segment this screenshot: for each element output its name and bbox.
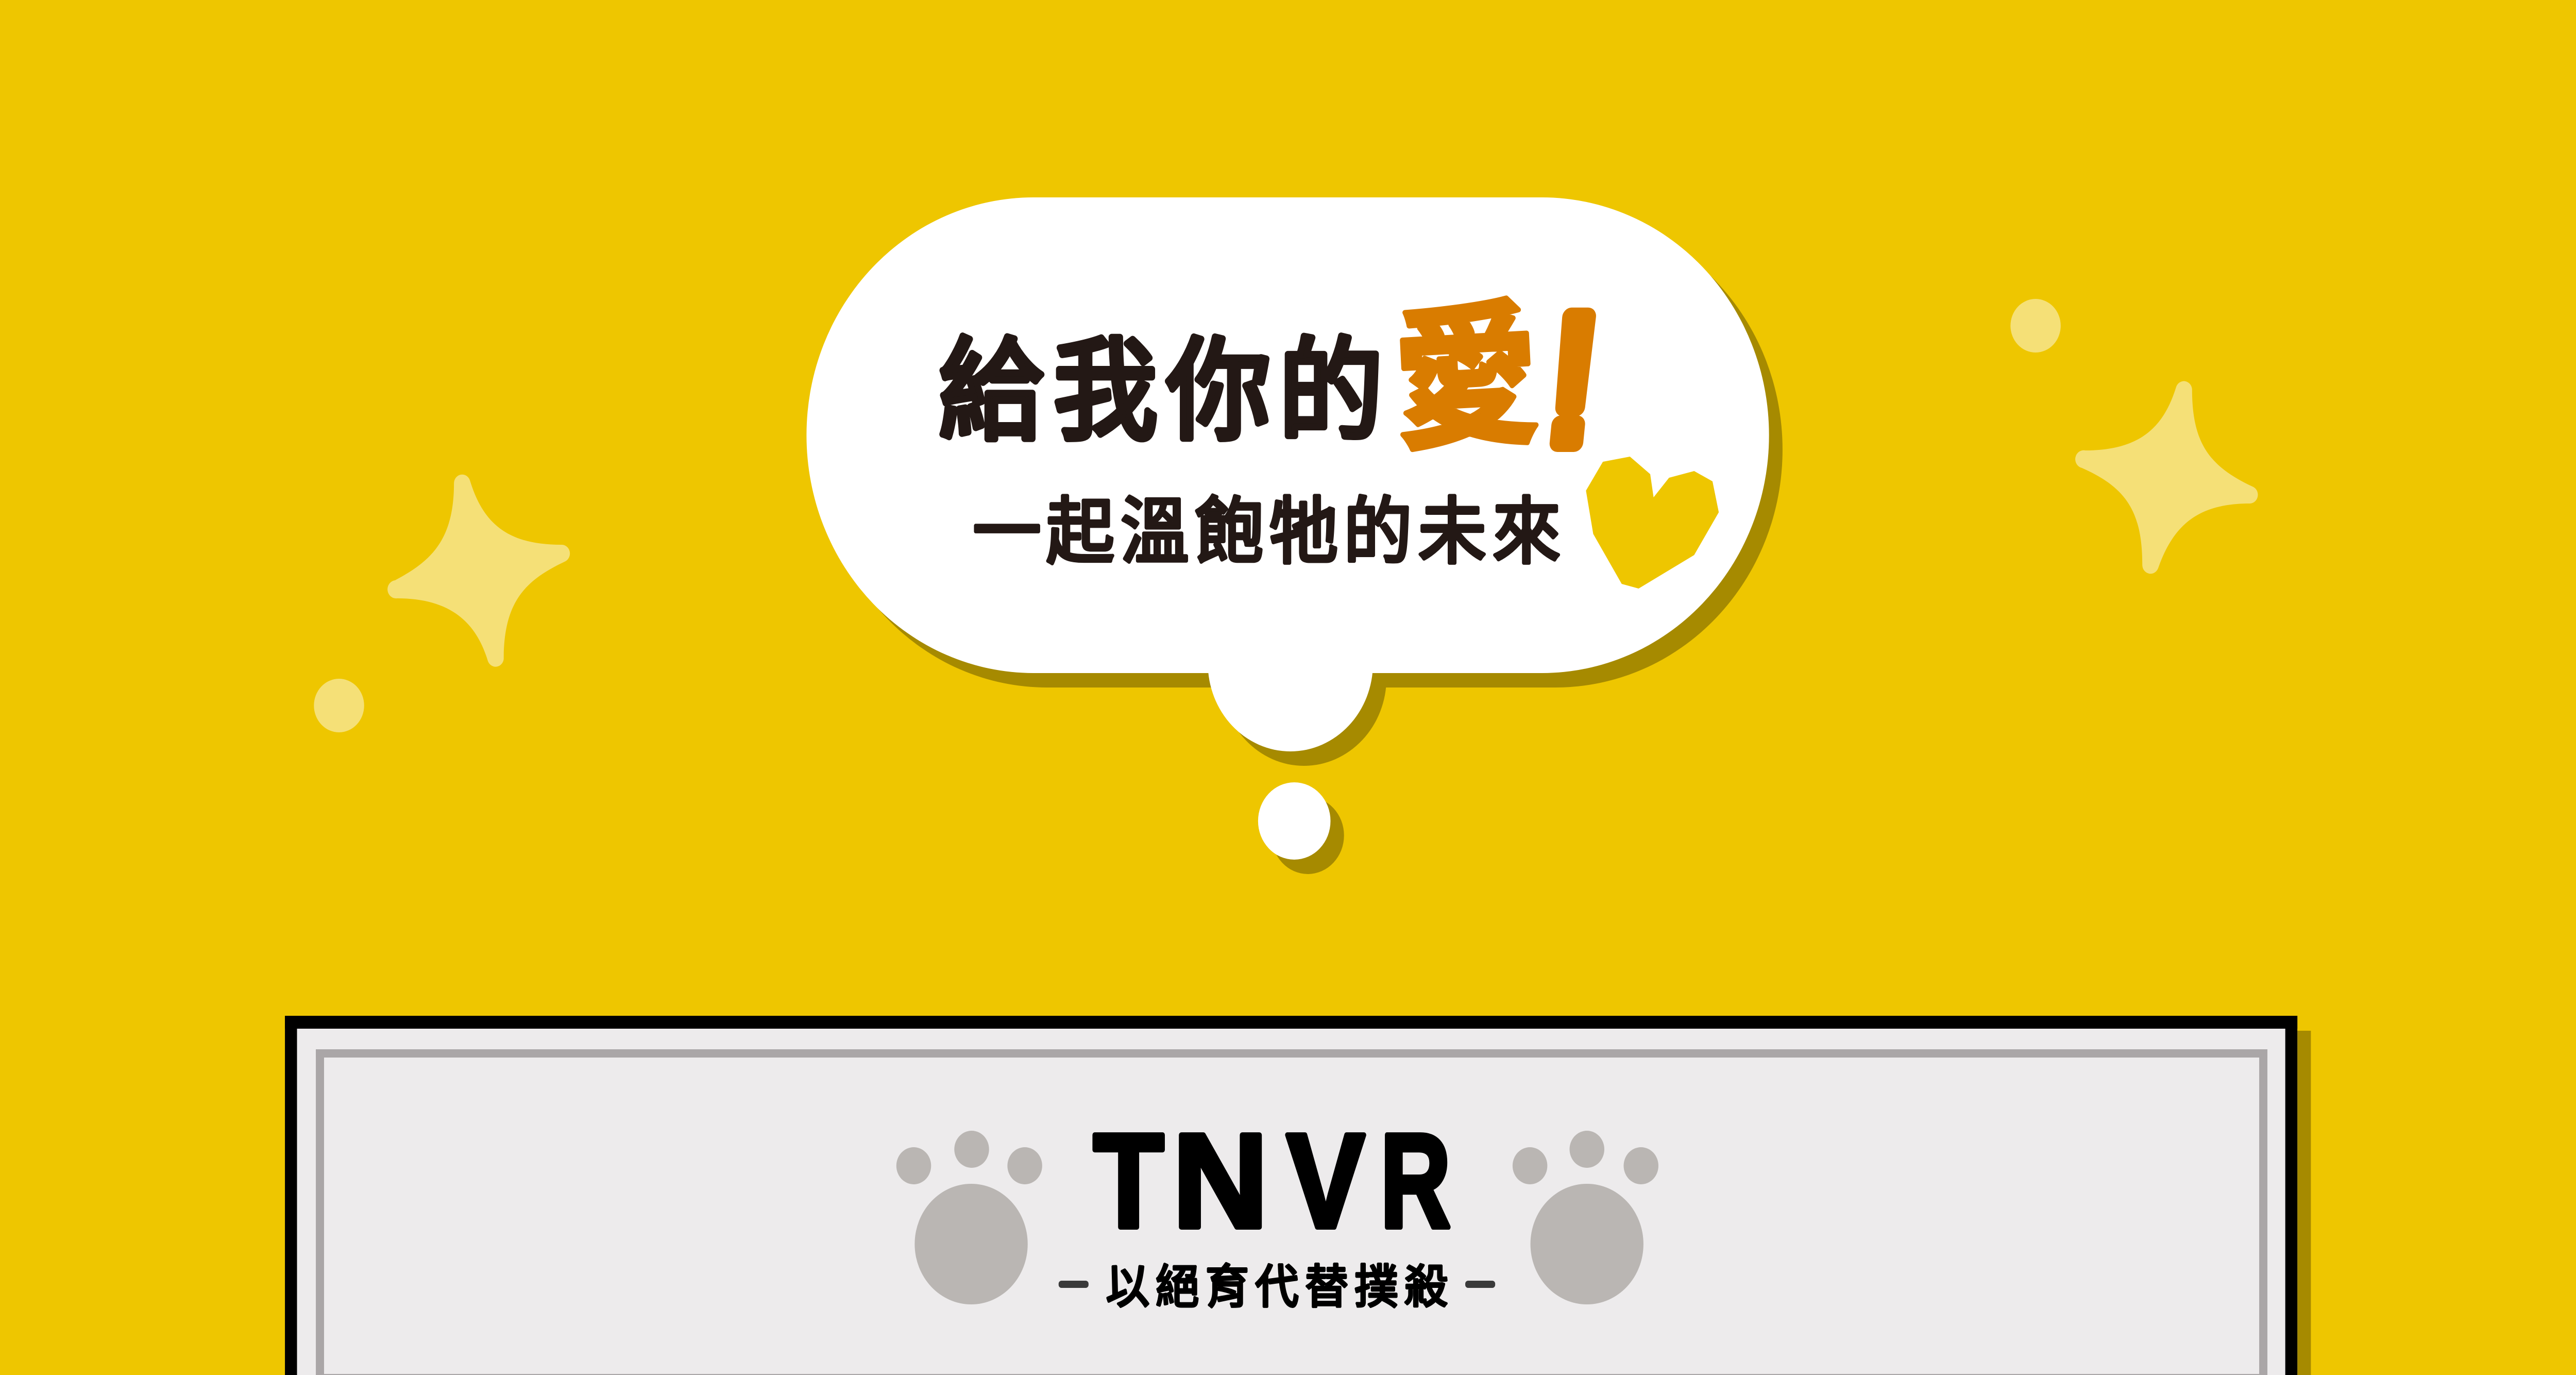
icon: right paw [1513,1131,1658,1304]
speech bubble shadow [820,212,1783,874]
subheading text: 以絕育代替撲殺 [1106,1262,1448,1313]
heading: TNVR: N [1173,1106,1268,1256]
subheading with dashes [1059,1262,1495,1313]
headline: love, orange: 愛 [1390,288,1543,469]
icon: right sparkle group [2010,299,2258,574]
left dash [1059,1281,1089,1288]
headline: give me your: 給我你的 [939,329,1383,454]
speech bubble [806,197,1769,860]
headline: exclamation mark: ! [1539,278,1607,482]
heading: TNVR: V [1286,1106,1365,1256]
panel shadow [298,1031,2311,1375]
icon: yellow polygon heart [1586,457,1719,589]
heading: TNVR: T [1093,1106,1164,1256]
panel: TNVR card [285,1016,2311,1375]
panel fill [285,1016,2297,1375]
subheadline: 一起溫飽牠的未來 [973,491,1561,573]
panel inner frame [316,1049,2267,1375]
icon: left paw [896,1131,1042,1304]
right dash [1465,1281,1495,1288]
panel outer border [285,1016,2297,1375]
heading: TNVR: R [1380,1106,1451,1256]
icon: left sparkle group [314,475,570,732]
heading: TNVR [1093,1106,1451,1256]
